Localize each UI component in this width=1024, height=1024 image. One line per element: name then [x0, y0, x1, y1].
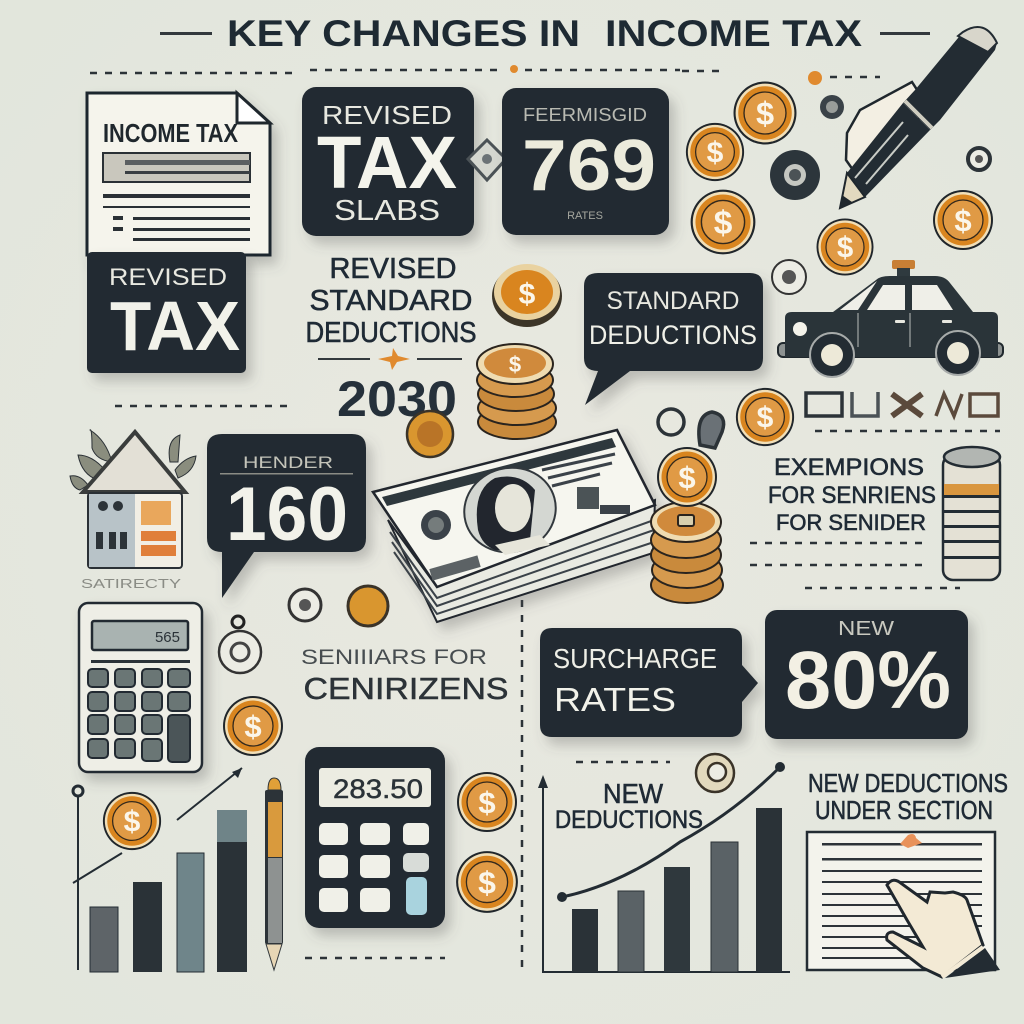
icon: grey coin stack [943, 447, 1000, 580]
text: seniors for citizens [301, 646, 508, 706]
dotted dividers [90, 70, 1000, 970]
callout: standard deductions: DEDUCTIONS [589, 320, 757, 350]
panel: new 80% [765, 610, 968, 739]
text: new deductions under section: UNDER SECTION [815, 795, 993, 825]
text: new deductions [555, 778, 703, 834]
icon: coin small [407, 411, 453, 457]
panel: revised tax slabs: TAX [317, 121, 457, 204]
icon: diamond connector [468, 140, 506, 180]
callout: surcharge rates [540, 628, 758, 737]
title [160, 13, 930, 54]
callout: standard deductions [584, 273, 763, 405]
icons: coins beside calculator [456, 772, 518, 913]
icons: coins top right [686, 82, 993, 276]
text: exemptions for seniors: FOR SENRIENS [768, 482, 936, 509]
panel: revised tax slabs [302, 87, 474, 236]
icons: small coins mid [219, 586, 388, 673]
callout: surcharge rates: SURCHARGE [553, 643, 717, 674]
panel: income tax document: INCOME TAX [103, 118, 239, 148]
callout: 160: HENDER [243, 453, 333, 472]
panel: new 80%: 80% [785, 635, 951, 726]
text: exemptions for seniors [768, 454, 936, 535]
text: revised standard deductions [306, 253, 476, 349]
icon: small ring [772, 260, 806, 294]
text: exemptions for seniors: FOR SENIDER [776, 510, 926, 535]
icon: car [778, 260, 1003, 377]
callout: surcharge rates: RATES [554, 681, 676, 718]
panel: income tax document: REVISED [109, 264, 227, 291]
text: revised standard deductions: STANDARD [310, 285, 472, 317]
icons: rings top right [770, 95, 990, 200]
decoration marks [510, 65, 822, 85]
text: revised standard deductions: DEDUCTIONS [306, 317, 476, 349]
callout: 160: 160 [226, 472, 348, 557]
icon: coin lower left [223, 696, 283, 756]
panel: rates 769 [502, 88, 669, 235]
panel: new 80%: NEW [838, 618, 894, 640]
icon: coin single [492, 264, 562, 327]
chart: bar chart left [73, 768, 247, 972]
icon: coin stack left: $ [509, 352, 521, 377]
text: seniors for citizens: SENIIIARS FOR [301, 646, 487, 669]
icon: pencil [265, 778, 283, 970]
icon: coin center right [736, 388, 794, 446]
chart: new deductions line and bars [538, 754, 790, 972]
panel: revised tax slabs: SLABS [334, 195, 440, 227]
icon: coin stack left [477, 344, 556, 439]
text: seniors for citizens: CENIRIZENS [304, 671, 508, 706]
text: new deductions: DEDUCTIONS [555, 806, 703, 834]
icon: coin single: $ [519, 278, 536, 311]
icons: small decorative row [658, 392, 998, 448]
panel: income tax document: TAX [110, 287, 240, 365]
text: new deductions: NEW [603, 778, 664, 809]
panel: revised tax slabs: REVISED [322, 100, 452, 130]
text: faint house caption: SATIRECTY [81, 576, 181, 591]
panel: income tax document [87, 93, 270, 373]
icon: coin stack center [651, 447, 723, 603]
text: revised standard deductions: REVISED [330, 253, 456, 285]
icon: document with hand [807, 832, 1000, 978]
title: INCOME TAX [605, 13, 862, 54]
icon: orange divider [318, 348, 462, 370]
panel: rates 769: 769 [522, 126, 656, 206]
text: exemptions for seniors: EXEMPIONS [774, 454, 924, 481]
callout: standard deductions: STANDARD [606, 287, 740, 315]
icon: calculator center: 283.50 [333, 774, 423, 804]
panel: rates 769: RATES [567, 210, 603, 222]
icon: calculator left [79, 603, 202, 772]
title: KEY CHANGES IN [227, 13, 580, 54]
icon: hand with pen [840, 27, 997, 208]
icon: house [70, 430, 196, 568]
text: year number: 2030 [337, 371, 457, 427]
icon: calculator center [305, 747, 445, 928]
panel: rates 769: FEERMISGID [523, 105, 647, 125]
text: new deductions under section [808, 768, 1008, 825]
callout: 160 [207, 434, 366, 598]
icon: money stack [373, 430, 655, 622]
icon: calculator left: 565 [155, 629, 180, 646]
